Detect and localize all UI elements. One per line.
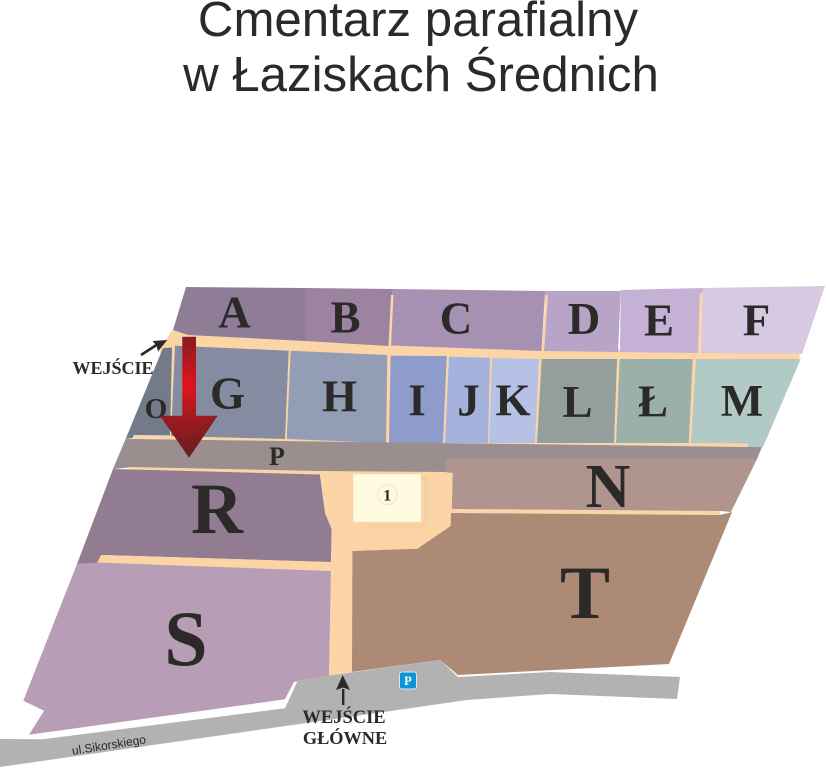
section H <box>287 351 387 443</box>
alley between R and S <box>97 555 332 571</box>
section J <box>445 357 490 443</box>
section C <box>391 289 545 351</box>
section Ł: Ł <box>638 376 668 426</box>
section Ł <box>616 359 693 443</box>
section A <box>173 287 306 341</box>
section G: G <box>210 368 245 418</box>
section F: F <box>743 296 770 346</box>
section A: A <box>218 288 251 338</box>
cemetery map <box>0 286 825 767</box>
section H: H <box>322 372 357 422</box>
icon: parking <box>400 672 416 689</box>
alley lines upper row <box>388 295 394 346</box>
label: main entrance: WEJŚCIE <box>302 706 386 728</box>
section T <box>352 512 732 675</box>
section T: T <box>560 552 610 635</box>
section E <box>620 288 703 353</box>
section B: B <box>330 292 361 342</box>
arrow: red location marker <box>160 337 218 458</box>
section F <box>701 286 825 354</box>
title <box>182 0 659 102</box>
arrow: side entrance <box>141 340 167 355</box>
central alley <box>129 467 720 676</box>
section N <box>446 453 757 521</box>
section L: L <box>562 377 593 427</box>
road: ul. Sikorskiego <box>0 660 680 767</box>
section K <box>489 358 539 443</box>
section E: E <box>644 296 674 346</box>
section O: O <box>145 393 167 425</box>
section D: D <box>568 294 600 344</box>
section I: I <box>408 376 426 426</box>
alleys <box>134 330 800 447</box>
section M <box>691 359 801 447</box>
section B <box>306 288 393 346</box>
label: main entrance second line: GŁÓWNE <box>303 727 387 748</box>
section M: M <box>721 376 763 426</box>
arrow: main entrance <box>336 675 350 705</box>
section J: J <box>457 376 480 426</box>
section P <box>113 438 762 472</box>
section S: S <box>164 595 208 682</box>
section S <box>23 562 331 735</box>
section R <box>77 469 332 564</box>
building 1: 1 <box>383 488 391 504</box>
section O <box>126 348 172 438</box>
section K: K <box>495 376 531 426</box>
label: side entrance: WEJŚCIE <box>72 357 154 378</box>
section L <box>537 359 617 443</box>
section I <box>389 356 447 443</box>
section G <box>171 346 289 439</box>
icon: parking: P <box>404 674 412 688</box>
road: ul. Sikorskiego: ul.Sikorskiego <box>71 732 147 758</box>
title: w Łaziskach Średnich <box>182 45 659 102</box>
section C: C <box>440 294 472 344</box>
section R: R <box>191 469 244 549</box>
building 1 <box>353 474 427 527</box>
section N: N <box>586 453 630 521</box>
section P: P <box>269 442 285 471</box>
section D <box>544 291 621 352</box>
